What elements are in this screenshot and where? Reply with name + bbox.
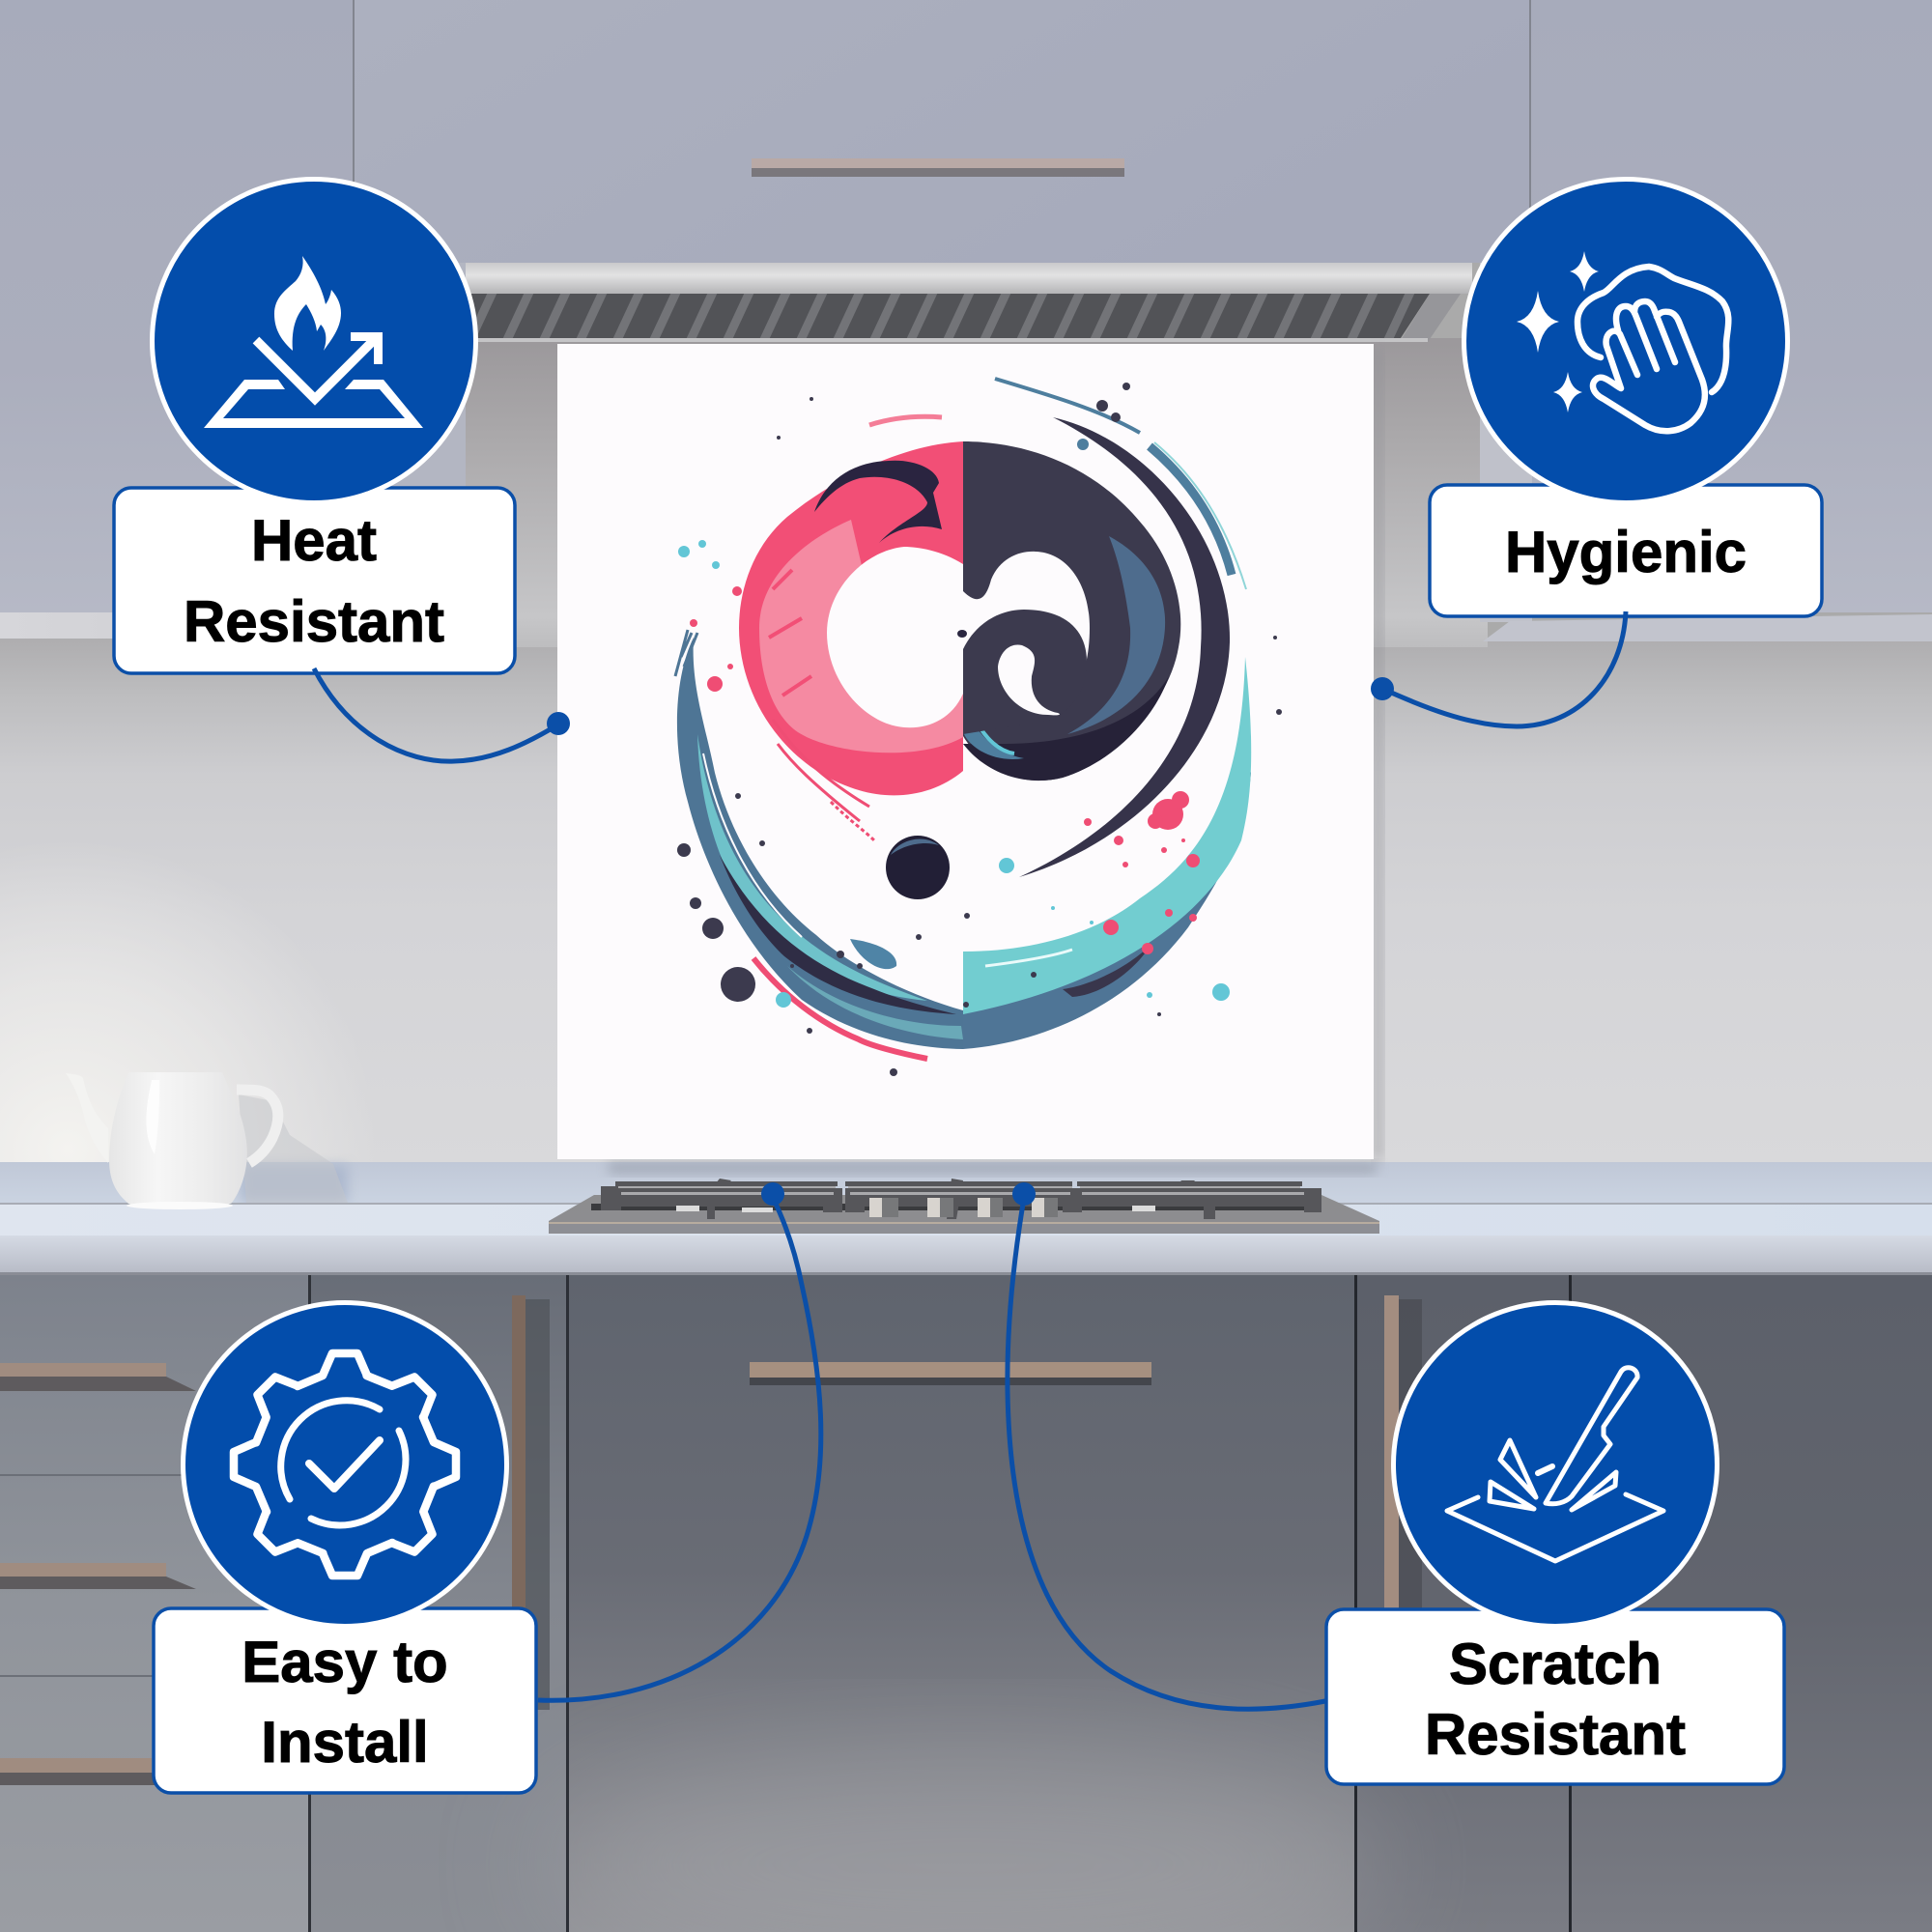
callout: Heat Resistant [114, 180, 570, 761]
icon: flame on surface with arrow [204, 256, 423, 428]
kitchen background: wall tiles [0, 338, 1932, 1179]
countertop [0, 1162, 1932, 1275]
connector line [538, 1198, 821, 1700]
extractor hood [466, 263, 1472, 342]
connector line with end dot [314, 668, 570, 761]
label text: Install [261, 1710, 429, 1775]
icon: hand wiping with sparkles [1517, 251, 1728, 431]
upper cabinet handle [752, 158, 1124, 177]
callout: Hygienic [1371, 180, 1822, 726]
icon: gear with check [233, 1352, 457, 1577]
label box [154, 1608, 536, 1793]
white pitcher [66, 1072, 348, 1209]
label text: Easy to [242, 1630, 448, 1694]
art: black ball [886, 836, 950, 899]
icon circle [1393, 1302, 1718, 1627]
icon circle [153, 180, 475, 502]
art: dark half with swirl [957, 441, 1180, 781]
icon circle [1464, 180, 1787, 502]
label text: Resistant [184, 589, 444, 654]
art: lower brush ring [675, 630, 1251, 1059]
icon: knife scratching surface [1447, 1368, 1663, 1561]
connector line with end dot [1371, 611, 1626, 726]
icon circle [184, 1302, 506, 1627]
connector line [1008, 1198, 1325, 1709]
label box [114, 488, 515, 673]
callout: Scratch Resistant [1008, 1182, 1784, 1784]
label box [1430, 485, 1822, 616]
upper wall cabinets [0, 0, 1932, 641]
gas hob [549, 1179, 1379, 1234]
label text: Resistant [1425, 1702, 1686, 1767]
lower cabinets [0, 1275, 1932, 1932]
label text: Hygienic [1505, 520, 1747, 584]
connector end dot [1012, 1182, 1036, 1206]
panel: artwork splashback [557, 344, 1382, 1159]
art: pink half [739, 416, 963, 840]
label text: Scratch [1449, 1632, 1662, 1696]
cabinet handles [0, 1295, 1422, 1785]
art: outer dark swoosh [995, 379, 1246, 877]
art: paint splatter [677, 383, 1282, 1076]
label box [1326, 1609, 1784, 1784]
label text: Heat [251, 508, 377, 573]
connector end dot [761, 1182, 784, 1206]
callout: Easy to Install [154, 1182, 821, 1793]
